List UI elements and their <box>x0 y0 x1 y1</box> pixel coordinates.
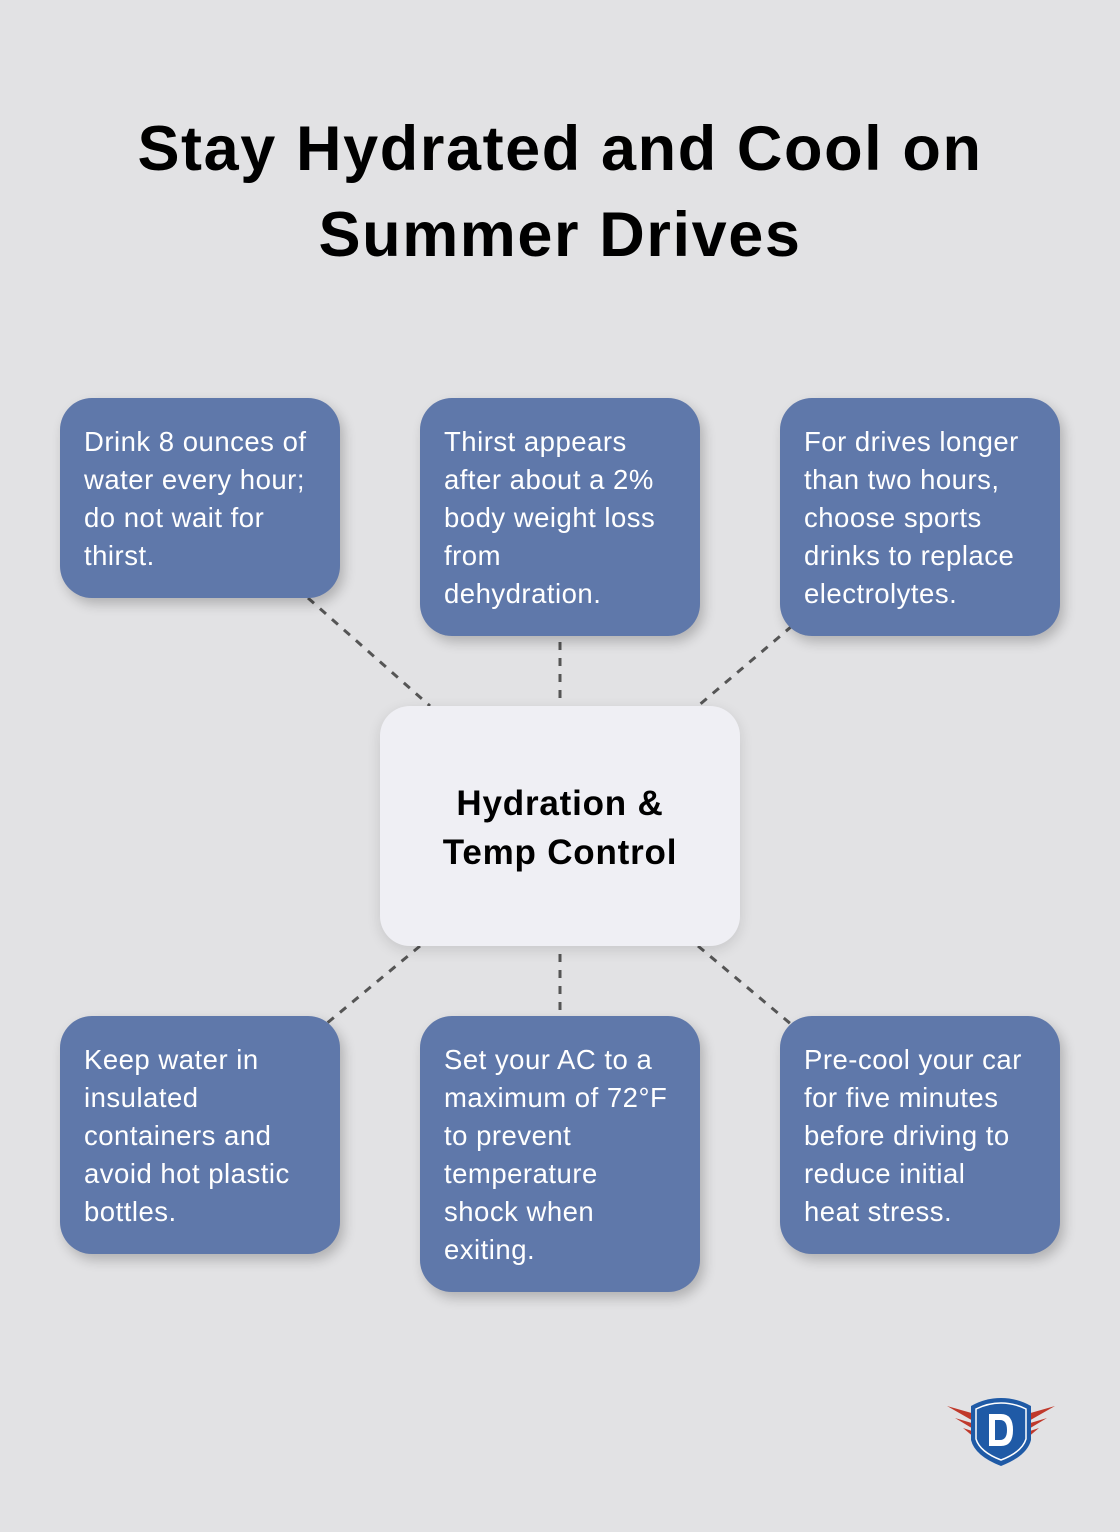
box: thirst: from <box>444 540 501 571</box>
title <box>137 114 983 270</box>
box: pre-cool: before driving to <box>804 1120 1010 1151</box>
box: sports drinks <box>780 398 1060 636</box>
box: insulated containers: Keep water in <box>84 1044 259 1075</box>
box: AC: shock when <box>444 1196 594 1227</box>
box: AC: exiting. <box>444 1234 535 1265</box>
box: AC: to prevent <box>444 1120 571 1151</box>
box: sports drinks: electrolytes. <box>804 578 957 609</box>
box: pre-cool: heat stress. <box>804 1196 952 1227</box>
box: drink water: do not wait for <box>84 502 264 533</box>
box: insulated containers: avoid hot plastic <box>84 1158 290 1189</box>
box: pre-cool: for five minutes <box>804 1082 998 1113</box>
box: insulated containers <box>60 1016 340 1254</box>
box: drink water: Drink 8 ounces of <box>84 426 306 457</box>
box: pre-cool: reduce initial <box>804 1158 965 1189</box>
center box: Temp Control <box>443 833 677 872</box>
box: pre-cool <box>780 1016 1060 1254</box>
box: insulated containers: bottles. <box>84 1196 177 1227</box>
box: thirst: after about a 2% <box>444 464 654 495</box>
box: sports drinks: than two hours, <box>804 464 1000 495</box>
box: insulated containers: insulated <box>84 1082 199 1113</box>
box: AC: Set your AC to a <box>444 1044 652 1075</box>
box: drink water <box>60 398 340 598</box>
box: drink water: thirst. <box>84 540 155 571</box>
box: thirst: dehydration. <box>444 578 601 609</box>
center box <box>380 706 740 946</box>
box: AC: temperature <box>444 1158 598 1189</box>
box: sports drinks: drinks to replace <box>804 540 1014 571</box>
title: Stay Hydrated and Cool on <box>137 114 983 184</box>
box: thirst <box>420 398 700 636</box>
box: pre-cool: Pre-cool your car <box>804 1044 1022 1075</box>
box: AC <box>420 1016 700 1292</box>
box: drink water: water every hour; <box>84 464 305 495</box>
center box: Hydration & <box>456 784 664 823</box>
icon: logo <box>947 1398 1055 1466</box>
title: Summer Drives <box>318 200 802 270</box>
box: AC: maximum of 72°F <box>444 1082 667 1113</box>
box: thirst: body weight loss <box>444 502 655 533</box>
box: insulated containers: containers and <box>84 1120 271 1151</box>
box: thirst: Thirst appears <box>444 426 627 457</box>
box: sports drinks: choose sports <box>804 502 982 533</box>
box: sports drinks: For drives longer <box>804 426 1019 457</box>
